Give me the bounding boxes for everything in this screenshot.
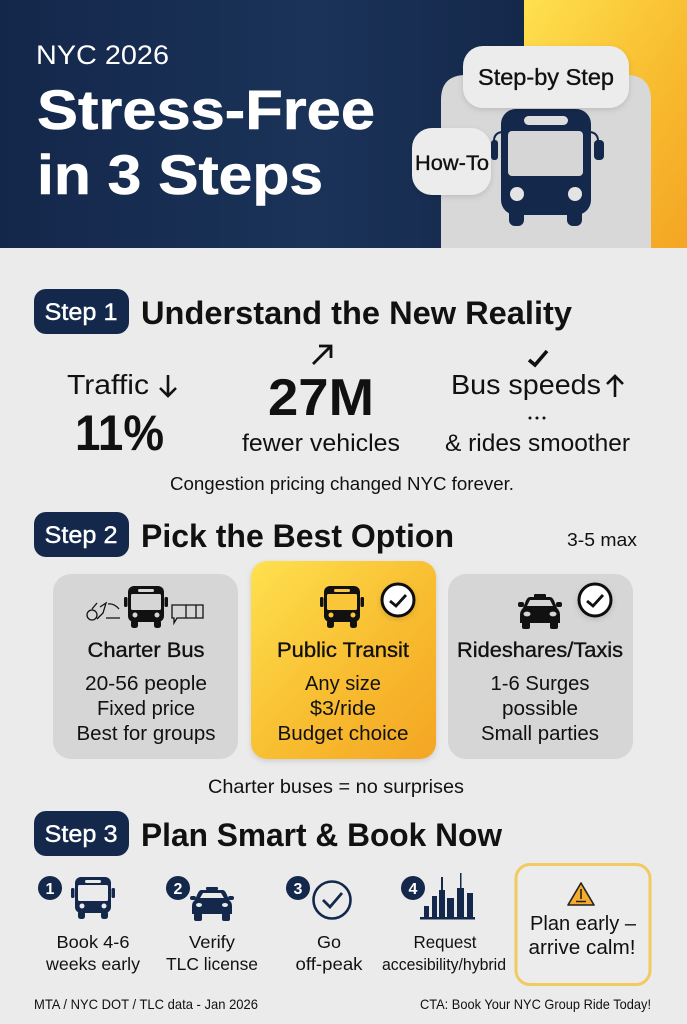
step 2 note: Charter buses = no surprises [208, 776, 464, 798]
item 1 label [45, 932, 140, 974]
footer call to action: CTA: Book Your NYC Group Ride Today! [420, 996, 651, 1012]
callout text [528, 913, 637, 959]
item 1 label: Book 4-6 [56, 932, 130, 952]
transit details: Budget choice [278, 723, 408, 745]
section: step 3 [34, 811, 650, 984]
section: step 2 [34, 512, 637, 798]
item 2 label [166, 932, 258, 974]
step 1 note: Congestion pricing changed NYC forever. [170, 473, 514, 494]
step 3 badge [34, 811, 129, 856]
charter details [76, 673, 216, 745]
step 1 badge [34, 289, 129, 334]
item 4: accessibility: 4 [409, 881, 418, 898]
item 4 label: Request [414, 932, 477, 952]
stat: vehicles: 27M [268, 369, 374, 427]
item 2: verify license: 2 [174, 881, 183, 898]
stat: bus speeds: Bus speeds [451, 369, 601, 400]
step 2 badge [34, 512, 129, 557]
item 3: off-peak [286, 876, 363, 974]
step 1 badge: Step 1 [44, 299, 118, 326]
main title: in 3 Steps [37, 143, 323, 206]
limit note: 3-5 max [567, 530, 637, 550]
stat: vehicles: fewer vehicles [242, 430, 400, 457]
icon: route arrows [87, 603, 120, 620]
callout: plan early [516, 864, 650, 984]
tag: step-by-step [463, 46, 629, 108]
icon: check circle [314, 882, 350, 918]
charter details: Fixed price [97, 698, 195, 720]
item 4: accessibility [382, 873, 506, 974]
rideshare title: Rideshares/Taxis [457, 639, 623, 662]
step 3 badge: Step 3 [44, 821, 118, 848]
stat: bus speeds [445, 351, 630, 457]
panel: rideshares and taxis [448, 574, 633, 759]
step 2 heading: Pick the Best Option [141, 518, 454, 554]
step 3 heading: Plan Smart & Book Now [141, 817, 502, 853]
charter details: 20-56 people [85, 673, 207, 695]
callout text: Plan early – [530, 913, 637, 935]
item 1: book early [38, 876, 140, 974]
panel: charter bus [53, 574, 238, 759]
stat: traffic: Traffic [67, 369, 149, 400]
icon: bus [320, 586, 364, 628]
stat: bus speeds: & rides smoother [445, 430, 630, 457]
icon: warning [568, 883, 594, 905]
transit details: $3/ride [310, 698, 376, 720]
item 1 label: weeks early [45, 954, 140, 974]
section: step 1 [34, 289, 630, 494]
item 2 label: Verify [189, 932, 235, 952]
tag: step-by-step: Step-by Step [478, 64, 614, 90]
step 1 heading: Understand the New Reality [141, 295, 572, 331]
transit details [278, 673, 408, 745]
main title: Stress-Free [37, 78, 375, 141]
main title [37, 78, 375, 206]
rideshare details: Small parties [481, 723, 599, 745]
callout text: arrive calm! [528, 937, 636, 959]
tag: how-to: How-To [415, 152, 489, 175]
item 2: verify license [166, 876, 258, 974]
stat: traffic [67, 369, 176, 461]
tag: how-to [412, 128, 491, 195]
icon: skyline [420, 873, 475, 920]
icon: map [172, 605, 203, 623]
charter title: Charter Bus [88, 639, 204, 662]
icon: taxi [190, 887, 234, 921]
item 3: off-peak: 3 [294, 881, 303, 898]
item 3 label [296, 932, 363, 974]
item 2 label: TLC license [166, 954, 258, 974]
header banner [0, 0, 687, 248]
rideshare details: 1-6 Surges [490, 673, 590, 695]
hero card with bus [441, 75, 651, 248]
transit title: Public Transit [277, 639, 409, 662]
stat: vehicles [242, 346, 400, 457]
header subtitle: NYC 2026 [36, 40, 169, 70]
rideshare details: possible [502, 698, 578, 720]
charter details: Best for groups [76, 723, 216, 745]
step 2 badge: Step 2 [44, 522, 118, 549]
icon: check badge [382, 584, 414, 616]
icon: bus [124, 586, 168, 628]
icon: bus [491, 109, 604, 226]
item 4 label: accesibility/hybrid [382, 956, 506, 974]
icon: taxi [518, 594, 562, 629]
item 1: book early: 1 [46, 881, 55, 898]
item 3 label: off-peak [296, 954, 363, 974]
rideshare details [481, 673, 599, 745]
item 4 label [382, 932, 506, 974]
icon: bus [71, 877, 115, 919]
panel: public transit [251, 561, 436, 759]
icon: check badge [579, 584, 611, 616]
stat: traffic: 11% [75, 405, 164, 461]
transit details: Any size [305, 673, 381, 695]
footer source: MTA / NYC DOT / TLC data - Jan 2026 [34, 996, 258, 1012]
item 3 label: Go [317, 932, 341, 952]
